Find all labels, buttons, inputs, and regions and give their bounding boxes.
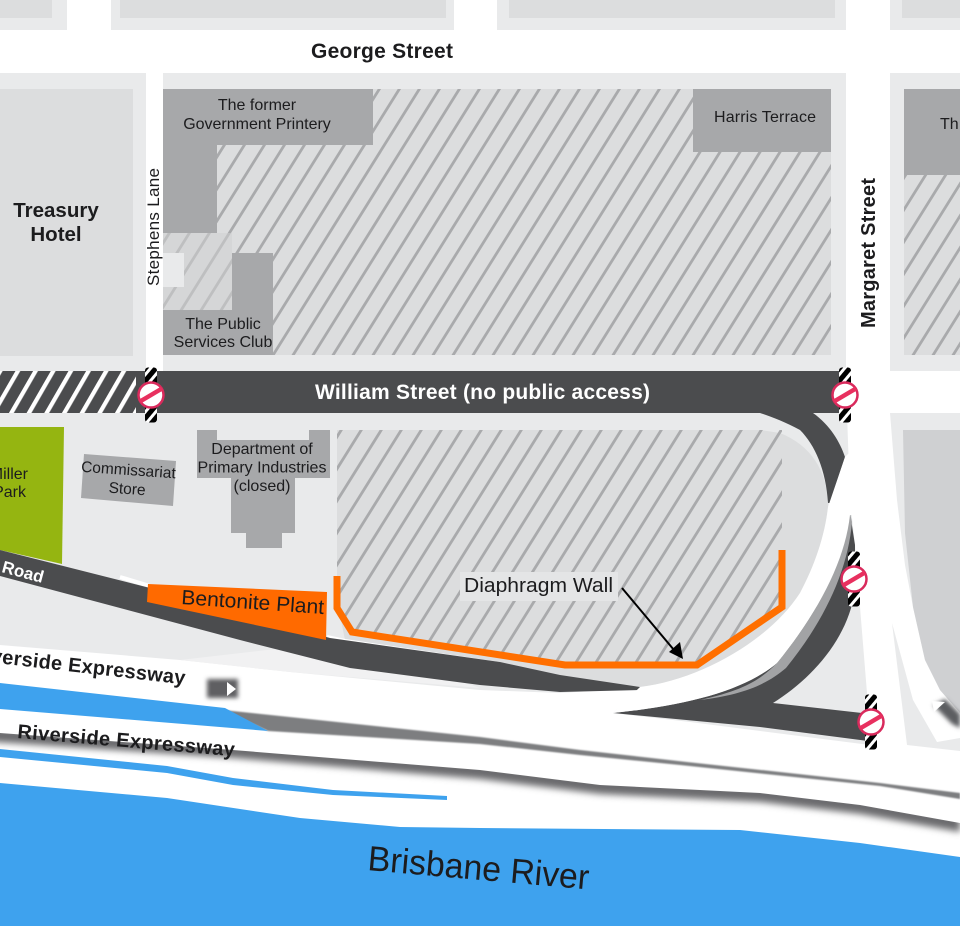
dark road: William Street	[0, 371, 846, 413]
Brisbane River	[0, 783, 960, 926]
building: former Government Printery	[163, 89, 373, 233]
label: William Street: William Street (no public access)	[315, 381, 650, 404]
building: Harris Terrace: Harris Terrace	[714, 109, 816, 126]
label: Stephens Lane: Stephens Lane	[144, 168, 163, 286]
arrow to diaphragm wall	[622, 588, 683, 659]
building: Public Services Club: Services Club	[174, 334, 272, 351]
building: Public Services Club: The Public	[185, 316, 261, 333]
block: lower right building	[890, 413, 960, 751]
block: Treasury Hotel	[0, 73, 146, 371]
block: main hatched site	[163, 73, 846, 371]
expressway shadow lower	[0, 727, 960, 832]
dark road: lower road	[0, 550, 640, 692]
white edges along lower road	[120, 577, 500, 664]
dark curve and access road	[613, 513, 868, 741]
expressway white lower band	[0, 640, 960, 823]
building: Commissariat Store: Commissariat	[81, 459, 176, 482]
no entry sign 1	[138, 368, 164, 422]
city blocks: top row	[0, 0, 960, 30]
building: Commissariat Store: Store	[108, 480, 146, 499]
building: Department of Primary Industries: Primary Industries	[198, 460, 326, 476]
direction arrow left	[207, 679, 238, 698]
no entry sign 3	[842, 552, 866, 606]
building: Commissariat Store	[79, 454, 177, 506]
bentonite plant: Bentonite Plant	[181, 586, 325, 619]
label: Treasury Hotel: Treasury	[13, 199, 99, 222]
block: right of Margaret Street	[890, 73, 960, 371]
block: right of Margaret Street: Th	[940, 116, 959, 133]
lighter road wedges	[180, 644, 480, 688]
label: George Street: George Street	[311, 40, 453, 63]
construction site	[337, 430, 828, 687]
blue river inlet	[0, 683, 268, 731]
light wedge between ramps	[892, 623, 960, 751]
building: former Government Printery: Government Printery	[183, 116, 331, 133]
lower land area	[0, 413, 870, 745]
direction arrow right	[932, 699, 960, 728]
white curved ramp	[613, 440, 862, 713]
label: Treasury Hotel: Hotel	[30, 223, 82, 246]
expressway shadow upper	[223, 710, 960, 799]
diaphragm wall outline	[337, 550, 782, 665]
label: Riverside Expressway lower: Riverside Expressway	[17, 721, 237, 761]
dark curved ramp from William Street	[760, 413, 845, 503]
label: Margaret Street: Margaret Street	[858, 178, 880, 328]
building: Department of Primary Industries	[197, 430, 330, 548]
building: former Government Printery: The former	[218, 97, 296, 114]
building: Department of Primary Industries: Department of	[211, 441, 313, 458]
bentonite plant	[147, 584, 327, 640]
label: Diaphragm Wall: Diaphragm Wall	[464, 575, 613, 597]
label: Road: Road	[0, 558, 46, 587]
building: Harris Terrace	[693, 89, 831, 152]
blue river sliver	[0, 749, 447, 800]
building: Department of Primary Industries: (closed)	[234, 478, 290, 495]
Miller Park	[0, 427, 64, 564]
ramp edge shading	[700, 513, 852, 700]
no entry sign 4	[858, 694, 884, 750]
Brisbane River: Brisbane River	[366, 839, 591, 897]
label: Diaphragm Wall	[460, 572, 618, 601]
building: Public Services Club	[163, 253, 273, 355]
no entry sign 2	[832, 368, 858, 422]
